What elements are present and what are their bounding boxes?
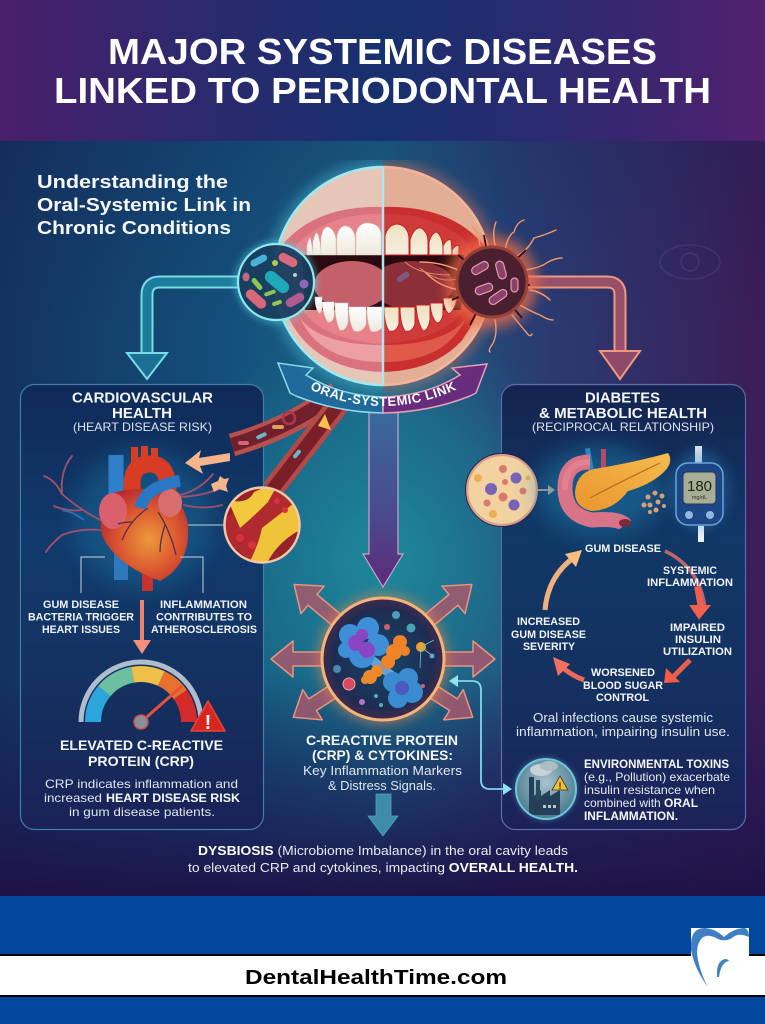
text: environmental toxins: combined with ORAL bbox=[584, 796, 698, 810]
cycle diagram: gum disease and diabetes: CONTROL bbox=[596, 692, 649, 704]
chart: CRP gauge bbox=[81, 662, 201, 729]
panel heading: cardiovascular bbox=[72, 390, 214, 434]
icon: atherosclerosis artery circle bbox=[188, 486, 301, 564]
text: CRP and cytokines: C-REACTIVE PROTEIN bbox=[306, 733, 458, 748]
text: elevated CRP: PROTEIN (CRP) bbox=[88, 753, 194, 769]
panel: diabetes background bbox=[502, 384, 746, 830]
footer band: DentalHealthTime.com bbox=[245, 967, 507, 989]
text: oral infections: inflammation, impairing insulin use. bbox=[516, 724, 730, 739]
cycle diagram: gum disease and diabetes: INFLAMMATION bbox=[647, 577, 733, 589]
icon: polluting factory bbox=[515, 758, 577, 820]
arrow: vessel to heart bbox=[185, 450, 230, 492]
text: environmental toxins: (e.g., Pollution) exacerbate bbox=[584, 770, 730, 784]
text: gum disease bacteria trigger heart issues: HEART ISSUES bbox=[42, 624, 120, 636]
panel heading: diabetes: (RECIPROCAL RELATIONSHIP) bbox=[532, 420, 714, 434]
text: dysbiosis summary bbox=[188, 844, 578, 875]
text: dysbiosis summary: to elevated CRP and cytokines, impacting OVERALL HEALTH. bbox=[188, 861, 578, 875]
title band: MAJOR SYSTEMIC DISEASES bbox=[108, 31, 657, 72]
text: elevated CRP: ELEVATED C-REACTIVE bbox=[60, 737, 223, 753]
text: elevated CRP: CRP indicates inflammation and bbox=[45, 777, 238, 791]
arrow: heart to CRP gauge bbox=[133, 600, 151, 654]
cycle diagram: gum disease and diabetes: GUM DISEASE bbox=[585, 543, 661, 555]
cycle diagram: gum disease and diabetes bbox=[511, 543, 733, 704]
main background bbox=[0, 141, 765, 896]
subtitle: Understanding the bbox=[37, 171, 228, 192]
panel heading: cardiovascular: (HEART DISEASE RISK) bbox=[73, 420, 212, 434]
subtitle bbox=[37, 171, 251, 238]
icon: glucose meter bbox=[670, 446, 730, 542]
text: elevated CRP: HEART DISEASE RISK bbox=[106, 791, 240, 805]
panel heading: cardiovascular: HEALTH bbox=[112, 406, 172, 422]
text: gum disease bacteria trigger heart issues: GUM DISEASE bbox=[43, 599, 119, 611]
cycle diagram: gum disease and diabetes: INSULIN bbox=[675, 634, 721, 646]
text: environmental toxins: ENVIRONMENTAL TOXINS bbox=[584, 757, 729, 771]
oral-systemic link curved arrow bbox=[276, 362, 488, 414]
illustration: healthy vs diseased mouth bbox=[267, 160, 499, 395]
logo: tooth bbox=[691, 928, 749, 987]
icon: CRP and cytokine molecules bbox=[318, 594, 448, 724]
cycle diagram: gum disease and diabetes: BLOOD SUGAR bbox=[583, 680, 663, 692]
panel heading: diabetes bbox=[532, 390, 714, 434]
text: CRP and cytokines bbox=[303, 733, 462, 793]
panel heading: diabetes: & METABOLIC HEALTH bbox=[539, 406, 707, 422]
text: elevated CRP: in gum disease patients. bbox=[69, 805, 215, 819]
arrow: healthy path to cardiovascular panel bbox=[127, 282, 240, 379]
title band: LINKED TO PERIODONTAL HEALTH bbox=[54, 70, 711, 111]
text: environmental toxins: INFLAMMATION. bbox=[584, 809, 678, 823]
bracket lines from heart to labels bbox=[81, 557, 203, 593]
right half: diseased bbox=[384, 168, 485, 384]
icon: warning triangle bbox=[191, 701, 225, 734]
cycle diagram: gum disease and diabetes: GUM DISEASE bbox=[511, 629, 586, 641]
text: elevated CRP bbox=[44, 737, 240, 819]
text: inflammation contributes to atherosclerosis: CONTRIBUTES TO bbox=[156, 612, 252, 624]
icon: pancreas bbox=[535, 445, 670, 535]
oral-systemic link curved arrow: ORAL-SYSTEMIC LINK bbox=[312, 381, 456, 406]
icon: healthy bacteria circle bbox=[234, 240, 318, 324]
panel heading: diabetes: DIABETES bbox=[585, 390, 660, 406]
title band bbox=[0, 0, 765, 141]
subtitle: Oral-Systemic Link in bbox=[37, 194, 251, 215]
text: gum disease bacteria trigger heart issues bbox=[28, 599, 134, 636]
panel: cardiovascular background bbox=[20, 384, 264, 830]
icon: warning triangle: ! bbox=[205, 712, 211, 734]
text: CRP and cytokines: Key Inflammation Markers bbox=[303, 764, 462, 778]
text: CRP and cytokines: & Distress Signals. bbox=[328, 779, 436, 793]
subtitle: Chronic Conditions bbox=[37, 217, 231, 238]
panel heading: cardiovascular: CARDIOVASCULAR bbox=[72, 390, 214, 406]
icon: cell cluster circle bbox=[466, 454, 538, 526]
connector: environmental toxins to CRP bbox=[449, 675, 512, 795]
text: oral infections: Oral infections cause systemic bbox=[533, 710, 713, 725]
cycle diagram: gum disease and diabetes: SEVERITY bbox=[523, 641, 576, 653]
cycle diagram: gum disease and diabetes: UTILIZATION bbox=[663, 646, 732, 658]
text: inflammation contributes to atherosclerosis bbox=[151, 599, 257, 636]
text: dysbiosis summary: DYSBIOSIS (Microbiome Imbalance) in the oral cavity leads bbox=[198, 844, 568, 858]
arrows: CRP radiating signals bbox=[271, 571, 495, 732]
icon: harmful microbe bbox=[420, 220, 562, 352]
icon: heart with branching vessels bbox=[44, 446, 226, 591]
text: CRP and cytokines: (CRP) & CYTOKINES: bbox=[312, 748, 453, 763]
central downward arrow bbox=[363, 410, 403, 587]
text: inflammation contributes to atherosclerosis: ATHEROSCLEROSIS bbox=[151, 624, 257, 636]
text: environmental toxins: insulin resistance when bbox=[584, 783, 715, 797]
cycle diagram: gum disease and diabetes: IMPAIRED bbox=[670, 622, 725, 634]
arrow: cells to pancreas bbox=[537, 485, 555, 495]
cycle diagram: gum disease and diabetes: INCREASED bbox=[517, 616, 580, 628]
text: inflammation contributes to atherosclerosis: INFLAMMATION bbox=[160, 599, 247, 611]
left half: healthy bbox=[276, 168, 382, 384]
cycle diagram: gum disease and diabetes: WORSENED bbox=[591, 667, 655, 679]
arrow: CRP to overall health bbox=[368, 794, 398, 836]
icon: polluting factory: ! bbox=[558, 781, 562, 791]
icon: glucose meter: 180 bbox=[687, 478, 712, 495]
text: oral infections bbox=[516, 710, 730, 739]
cycle diagram: gum disease and diabetes: SYSTEMIC bbox=[663, 565, 717, 577]
arrow: diseased path to diabetes panel bbox=[528, 282, 640, 379]
text: environmental toxins bbox=[584, 757, 730, 823]
blood vessels with bacteria bbox=[232, 392, 342, 490]
footer band bbox=[0, 896, 765, 1024]
icon: glucose meter: mg/dL bbox=[692, 495, 707, 501]
text: gum disease bacteria trigger heart issues: BACTERIA TRIGGER bbox=[28, 612, 134, 624]
text: elevated CRP: increased bbox=[44, 791, 102, 805]
